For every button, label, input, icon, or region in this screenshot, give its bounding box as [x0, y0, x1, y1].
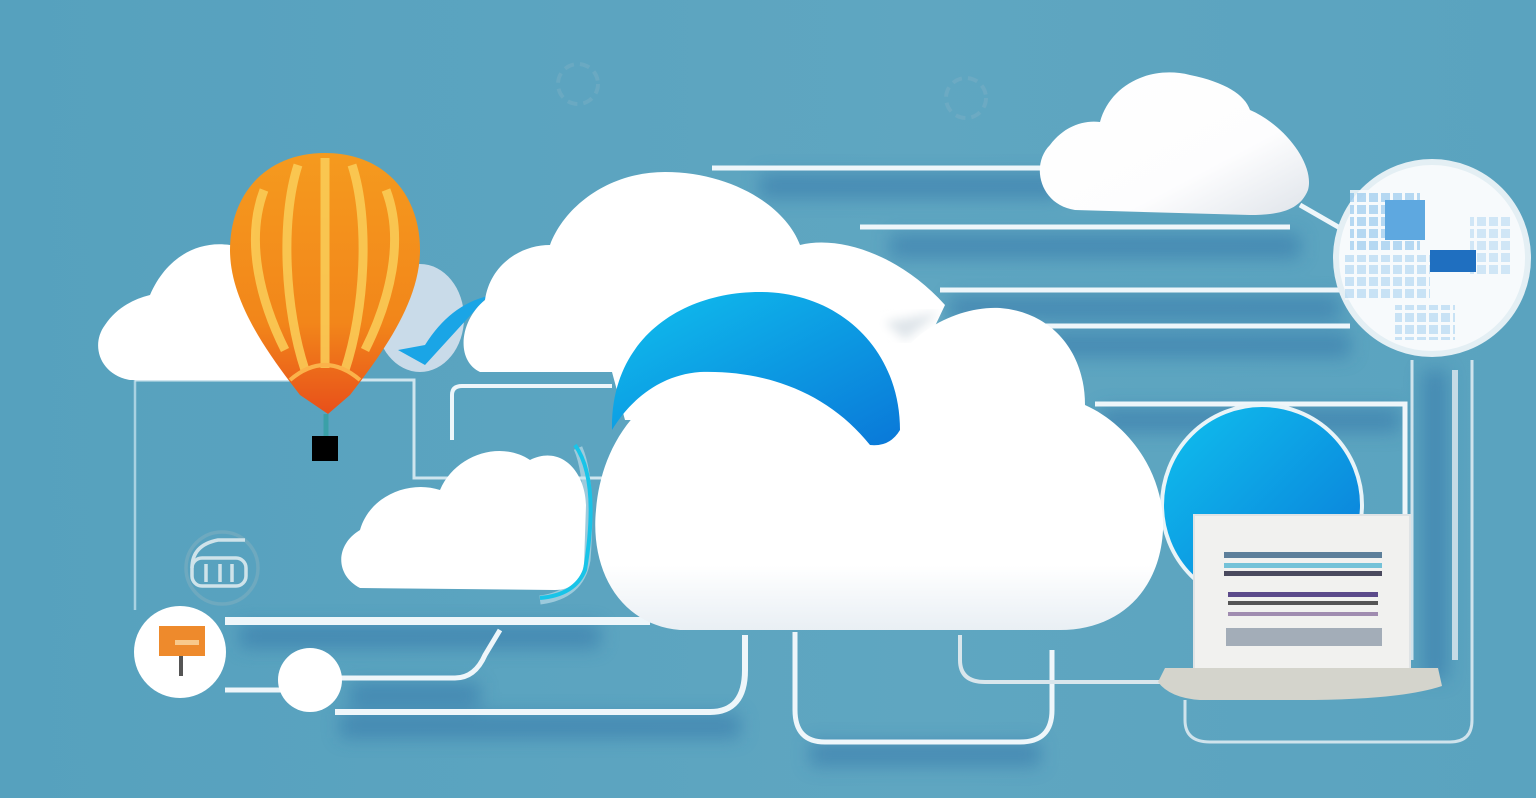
cloud: left — [98, 244, 464, 380]
cloud: small lower — [341, 445, 591, 600]
screen text lines — [1224, 552, 1382, 646]
main cloud: front — [595, 308, 1163, 630]
blue arc: center — [612, 292, 900, 445]
blue tick accent — [398, 296, 488, 365]
connector shadows — [240, 186, 1435, 754]
blue sphere — [1162, 405, 1362, 605]
laptop base — [1158, 668, 1442, 700]
laptop — [1158, 515, 1442, 700]
faint background icons — [558, 64, 986, 118]
small node: connector junction — [278, 648, 342, 712]
orange sign node — [134, 606, 226, 698]
main cloud: back — [464, 172, 945, 420]
small server icon — [186, 532, 258, 604]
laptop screen — [1194, 515, 1410, 670]
cloud: top right — [1040, 72, 1309, 215]
hot air balloon — [230, 153, 420, 461]
circuit lines — [135, 168, 1472, 742]
globe — [1336, 162, 1528, 354]
